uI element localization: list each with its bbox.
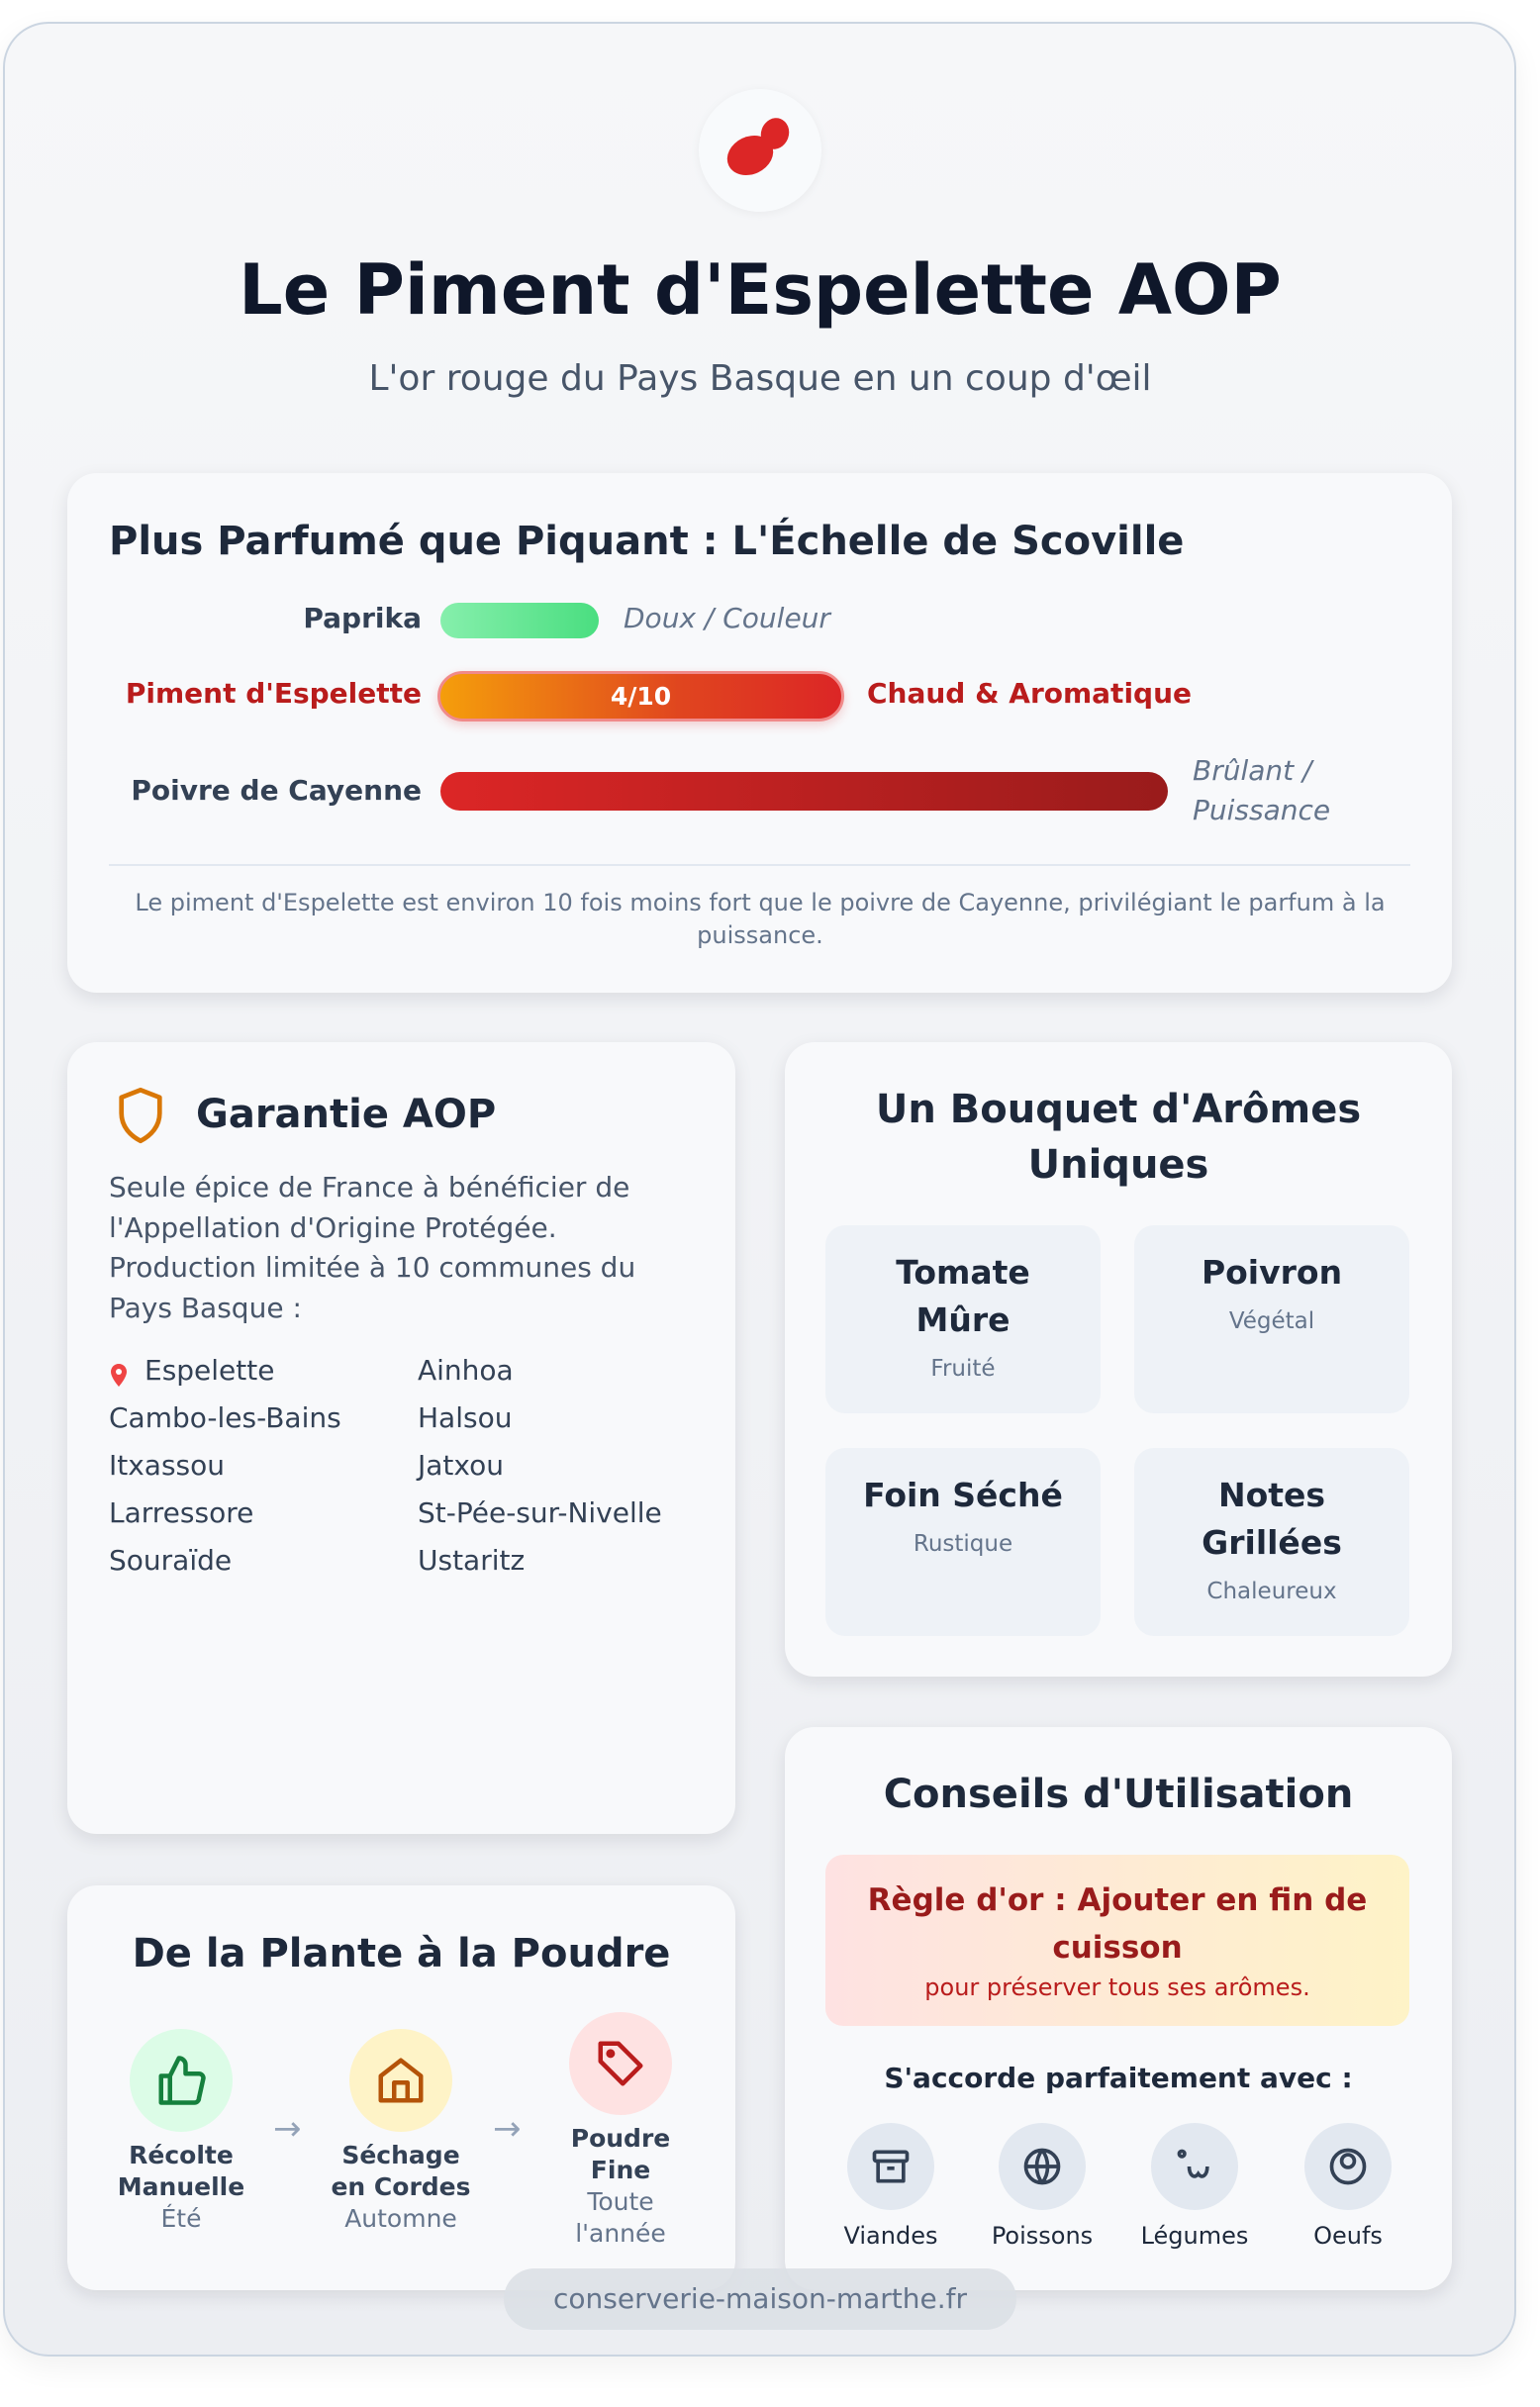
- note: Le piment d'Espelette est environ 10 fois moins fort que le poivre de Cayenne, privilégiant le parfum à la puissance.: [135, 889, 1386, 949]
- step: récolte: Été: [160, 2204, 201, 2233]
- tile: tomate mûre: [825, 1225, 1101, 1413]
- step: récolte: [118, 2029, 244, 2233]
- row: paprika: Paprika: [303, 602, 422, 634]
- list: communes: Cambo-les-Bains: [109, 1401, 341, 1434]
- list: communes: Larressore: [109, 1496, 253, 1529]
- step: poudre: Fine: [591, 2156, 650, 2184]
- step: poudre: [569, 2012, 672, 2248]
- row: paprika: [303, 602, 831, 638]
- arrow: →: [493, 2109, 521, 2149]
- step: poudre: Poudre: [571, 2124, 670, 2153]
- row: espelette: 4/10: [611, 682, 671, 711]
- tile: notes grillées: Grillées: [1202, 1523, 1342, 1562]
- step: récolte: Récolte: [129, 2141, 234, 2169]
- list: communes: Itxassou: [109, 1449, 225, 1482]
- list: communes: St-Pée-sur-Nivelle: [418, 1496, 662, 1529]
- icon: shield: [119, 1087, 162, 1144]
- title: Le Piment d'Espelette AOP: [239, 249, 1282, 331]
- step: poudre: l'année: [575, 2219, 666, 2248]
- panel: bouquet d'arômes: [785, 1042, 1452, 1677]
- heading: plante: De la Plante à la Poudre: [133, 1931, 670, 1976]
- heading: bouquet: Un Bouquet d'Arômes: [876, 1087, 1361, 1132]
- text: description: Seule épice de France à bénéficier de l'Appellation d'Origine Protégée. Production limitée à 10 communes du Pays Basque :: [109, 1171, 635, 1324]
- step: séchage: Automne: [344, 2204, 457, 2233]
- list: communes: Jatxou: [418, 1449, 504, 1482]
- icons: pairings: Oeufs: [1313, 2222, 1383, 2250]
- panel: conseils d'utilisation: [785, 1727, 1452, 2290]
- row: espelette: Piment d'Espelette: [126, 677, 422, 710]
- step: séchage: [331, 2029, 471, 2233]
- heading: scoville: Plus Parfumé que Piquant : L'Échelle de Scoville: [109, 519, 1184, 564]
- callout: règle d'or: Règle d'or : Ajouter en fin de: [868, 1882, 1367, 1918]
- row: cayenne: Poivre de Cayenne: [131, 774, 422, 807]
- heading: conseils: Conseils d'Utilisation: [884, 1772, 1353, 1817]
- row: paprika: Doux / Couleur: [624, 602, 830, 634]
- tile: notes grillées: Notes: [1218, 1476, 1325, 1514]
- row: espelette: [126, 671, 1192, 729]
- tile: tomate mûre: Mûre: [916, 1300, 1010, 1339]
- footer: url pill: conserverie-maison-marthe.fr: [553, 2282, 967, 2315]
- icons: pairings: Légumes: [1141, 2222, 1248, 2250]
- tile: poivron: [1134, 1225, 1409, 1413]
- tile: foin séché: Foin Séché: [863, 1476, 1063, 1514]
- tile: tomate mûre: Fruité: [930, 1356, 996, 1382]
- row: cayenne: Brûlant /: [1193, 754, 1311, 787]
- panel: garantie AOP: [67, 1042, 735, 1834]
- list: communes: [109, 1354, 662, 1577]
- icons: pairings: [843, 2123, 1392, 2250]
- callout: règle d'or: pour préserver tous ses arômes.: [924, 1974, 1310, 2001]
- footer: url pill: [504, 2268, 1016, 2330]
- panel: scoville: [67, 473, 1452, 993]
- heading: garantie: Garantie AOP: [196, 1092, 496, 1137]
- tile: poivron: Poivron: [1202, 1253, 1342, 1292]
- heading: bouquet: Uniques: [1028, 1142, 1208, 1188]
- heading: bouquet: [876, 1087, 1361, 1188]
- step: récolte: Manuelle: [118, 2172, 244, 2201]
- row: cayenne: [131, 754, 1330, 826]
- subheading: accords: S'accorde parfaitement avec :: [884, 2062, 1353, 2094]
- list: communes: Ustaritz: [418, 1544, 525, 1577]
- list: communes: Souraïde: [109, 1544, 232, 1577]
- tile: tomate mûre: Tomate: [896, 1253, 1030, 1292]
- tile: poivron: Végétal: [1229, 1308, 1314, 1334]
- list: communes: Ainhoa: [418, 1354, 514, 1387]
- callout: règle d'or: cuisson: [1052, 1930, 1183, 1966]
- subtitle: L'or rouge du Pays Basque en un coup d'œil: [368, 358, 1152, 399]
- arrow: →: [273, 2109, 301, 2149]
- icons: pairings: Poissons: [992, 2222, 1093, 2250]
- row: espelette: Chaud & Aromatique: [867, 677, 1192, 710]
- list: communes: Espelette: [144, 1354, 274, 1387]
- tile: foin séché: [825, 1448, 1101, 1636]
- tile: foin séché: Rustique: [914, 1531, 1012, 1557]
- logo: pepper: [699, 89, 821, 212]
- list: communes: Halsou: [418, 1401, 512, 1434]
- tile: notes grillées: Chaleureux: [1206, 1579, 1337, 1604]
- row: cayenne: Puissance: [1193, 794, 1330, 826]
- step: poudre: Toute: [587, 2187, 654, 2216]
- tile: notes grillées: [1134, 1448, 1409, 1636]
- step: séchage: Séchage: [341, 2141, 460, 2169]
- step: séchage: en Cordes: [331, 2172, 471, 2201]
- panel: plante à la poudre: [67, 1885, 735, 2290]
- icons: pairings: Viandes: [843, 2222, 937, 2250]
- callout: règle d'or: [825, 1855, 1409, 2026]
